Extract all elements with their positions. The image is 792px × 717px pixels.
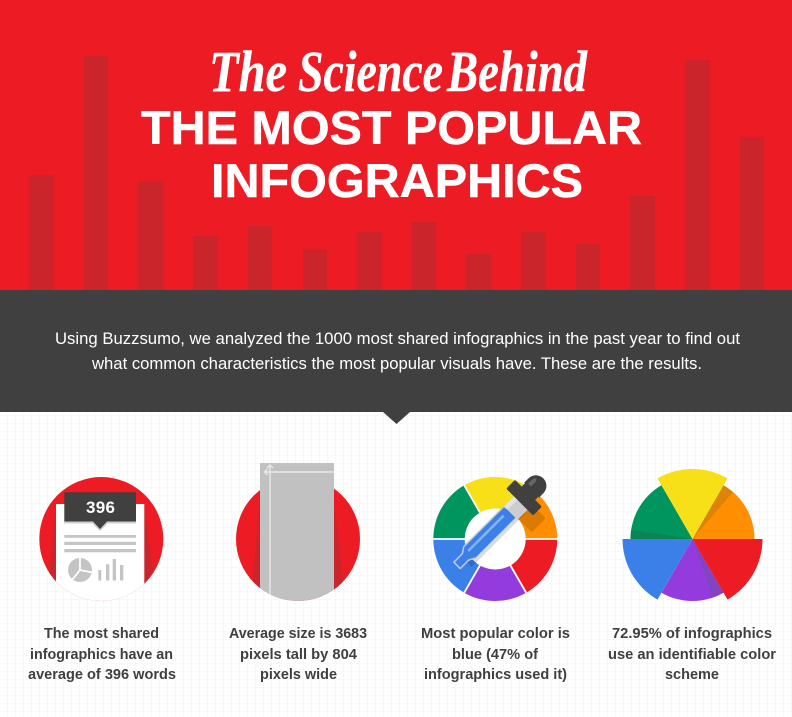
caption: words <box>28 626 176 683</box>
intro band: what common characteristics the most popular visuals have. These are the results. <box>91 355 702 373</box>
intro band: Using Buzzsumo, we analyzed the 1000 most shared infographics in the past year to find out <box>55 330 740 348</box>
caption: words: average of 396 words <box>28 667 176 683</box>
caption: words: infographics have an <box>30 647 173 663</box>
caption: blue <box>421 626 570 683</box>
title <box>141 39 642 207</box>
title: INFOGRAPHICS <box>211 154 583 207</box>
title: The <box>209 39 287 104</box>
title: Science <box>298 39 443 104</box>
caption: blue: Most popular color is <box>421 626 570 642</box>
caption: color scheme: use an identifiable color <box>608 647 776 663</box>
caption: color scheme <box>608 626 776 683</box>
background bar chart <box>29 56 764 290</box>
icon: exploded color scheme wheel <box>622 469 762 601</box>
word count label: 396 <box>86 498 115 517</box>
icon: color wheel with eyedropper <box>433 465 558 601</box>
caption: color scheme: 72.95% of infographics <box>612 626 772 642</box>
intro band <box>0 290 792 424</box>
caption: blue: infographics used it) <box>424 667 567 683</box>
header panel <box>0 0 792 290</box>
eyedropper <box>443 465 557 578</box>
dimension lines <box>264 465 334 595</box>
page background grid <box>0 412 792 717</box>
caption: size: pixels wide <box>260 667 337 683</box>
caption: blue: blue (47% of <box>452 647 538 663</box>
caption: size: Average size is 3683 <box>229 626 367 642</box>
icon: tall page size <box>236 463 360 603</box>
title: THE MOST POPULAR <box>141 101 642 154</box>
caption: size: pixels tall by 804 <box>240 647 357 663</box>
icon: document with word count <box>39 477 163 604</box>
caption: color scheme: scheme <box>665 667 719 683</box>
title: Behind <box>446 39 588 104</box>
caption: words: The most shared <box>44 626 159 642</box>
caption: size <box>229 626 367 683</box>
